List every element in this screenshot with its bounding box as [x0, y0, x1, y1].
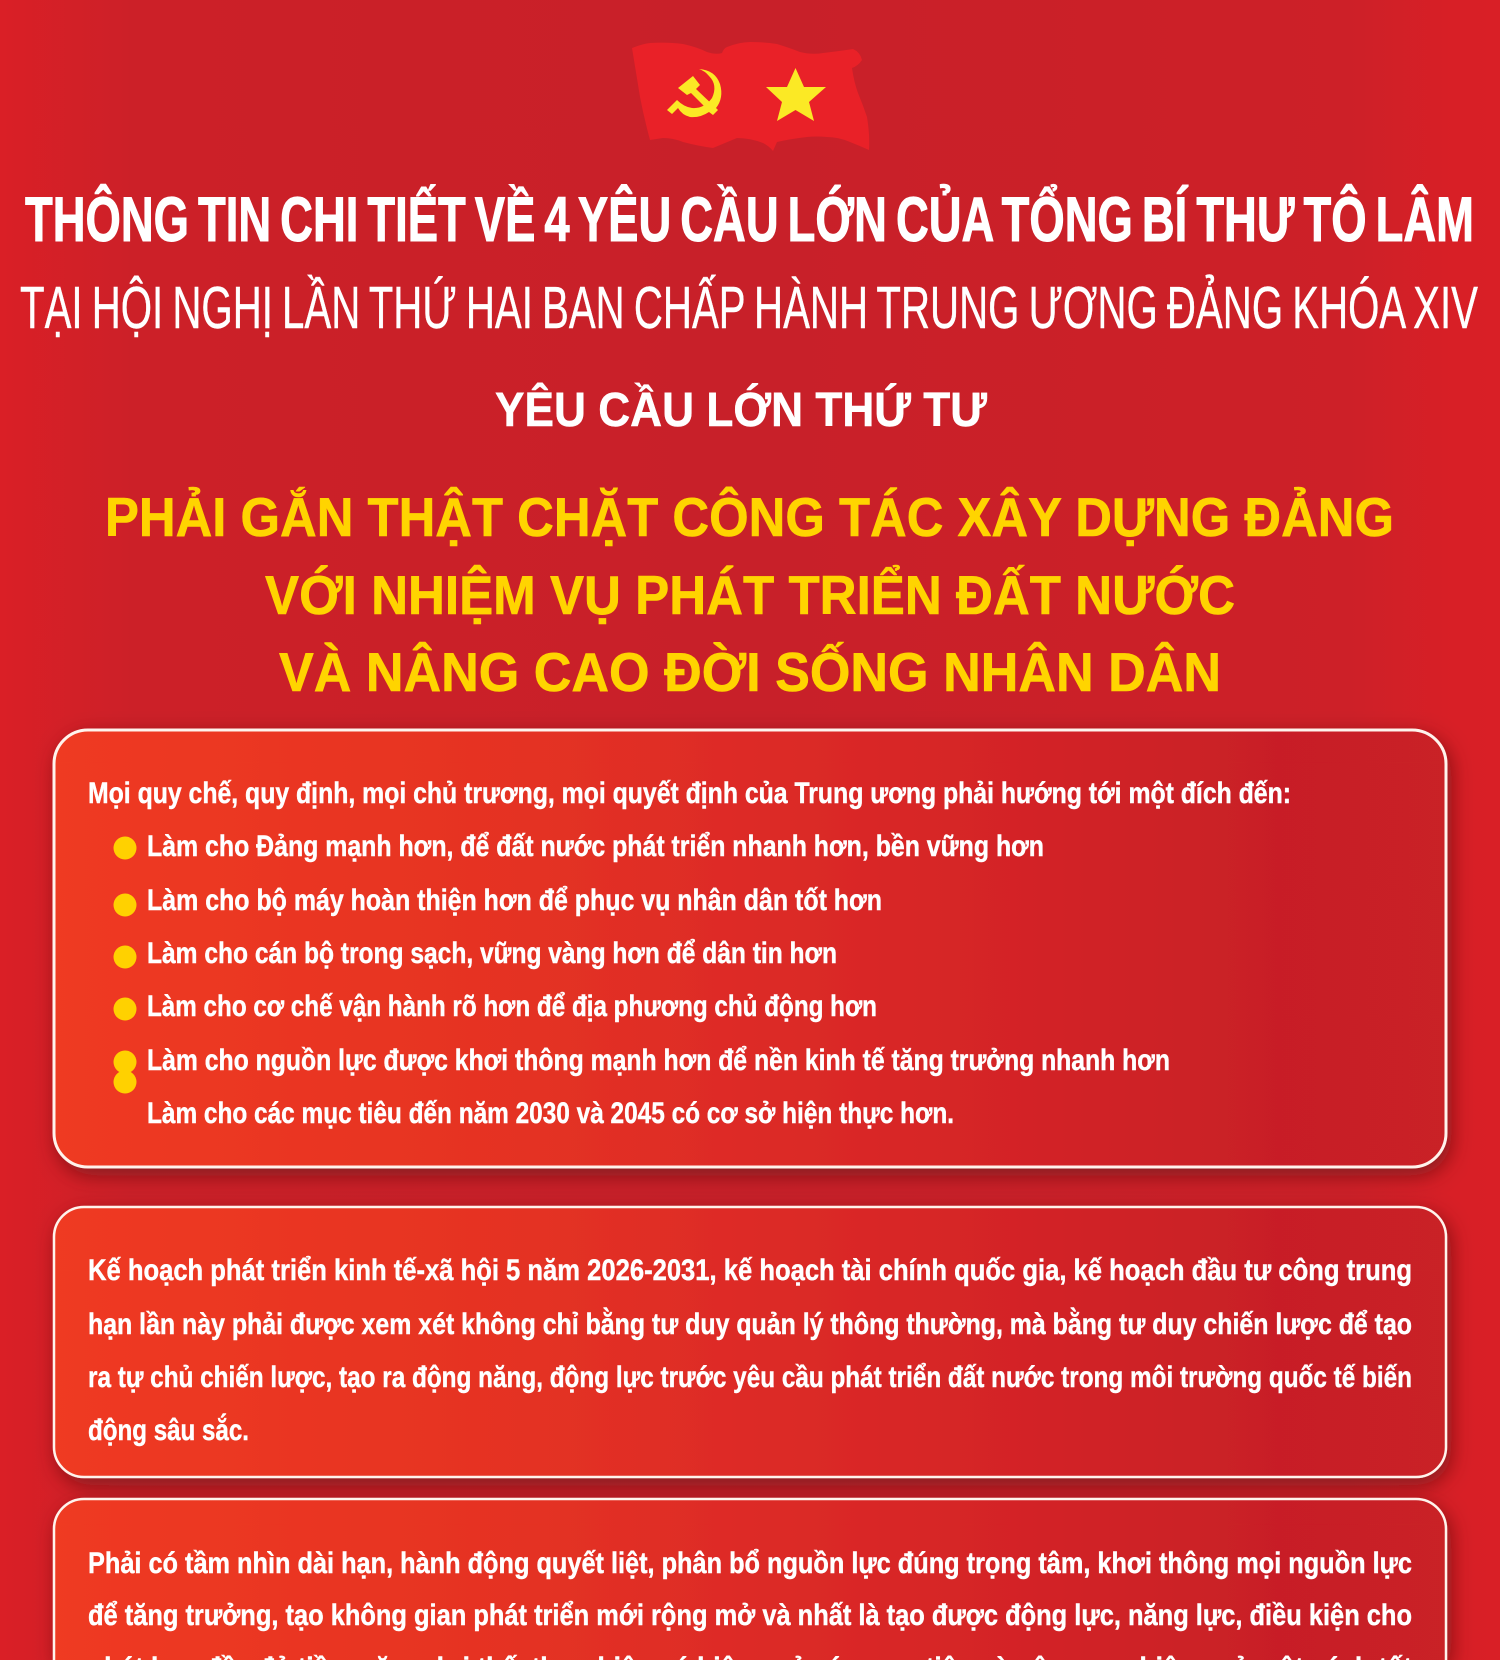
bullet list text: Làm cho nguồn lực được khơi thông mạnh hơn để nền kinh tế tăng trưởng nhanh hơn	[147, 1044, 1170, 1077]
bullet list text: Làm cho Đảng mạnh hơn, để đất nước phát triển nhanh hơn, bền vững hơn	[147, 830, 1044, 863]
icon: Communist Party flag and Vietnamese flag star	[632, 42, 869, 151]
panel: strategic thinking	[54, 1207, 1446, 1477]
panel: goals list	[54, 730, 1446, 1167]
paragraph: động sâu sắc.	[88, 1413, 249, 1447]
section heading: YÊU CẦU LỚN THỨ TƯ	[495, 382, 987, 437]
bullet list text: Làm cho các mục tiêu đến năm 2030 và 2045 có cơ sở hiện thực hơn.	[147, 1097, 954, 1130]
paragraph	[88, 1547, 1412, 1660]
bullet list text: Làm cho cán bộ trong sạch, vững vàng hơn để dân tin hơn	[147, 937, 837, 970]
bullet list text	[147, 830, 1170, 1130]
yellow headline	[105, 486, 1394, 703]
yellow headline: PHẢI GẮN THẬT CHẶT CÔNG TÁC XÂY DỰNG ĐẢNG	[105, 486, 1394, 548]
bullet markers	[114, 836, 136, 1094]
panel: long-term vision	[54, 1499, 1446, 1660]
yellow headline: VỚI NHIỆM VỤ PHÁT TRIỂN ĐẤT NƯỚC	[265, 564, 1235, 626]
yellow headline: VÀ NÂNG CAO ĐỜI SỐNG NHÂN DÂN	[279, 641, 1221, 703]
bullet list text: Làm cho bộ máy hoàn thiện hơn để phục vụ nhân dân tốt hơn	[147, 884, 882, 917]
intro sentence: Mọi quy chế, quy định, mọi chủ trương, mọi quyết định của Trung ương phải hướng tới một đích đến:	[88, 777, 1291, 810]
paragraph	[88, 1254, 1412, 1447]
bullet list text: Làm cho cơ chế vận hành rõ hơn để địa phương chủ động hơn	[147, 990, 877, 1023]
